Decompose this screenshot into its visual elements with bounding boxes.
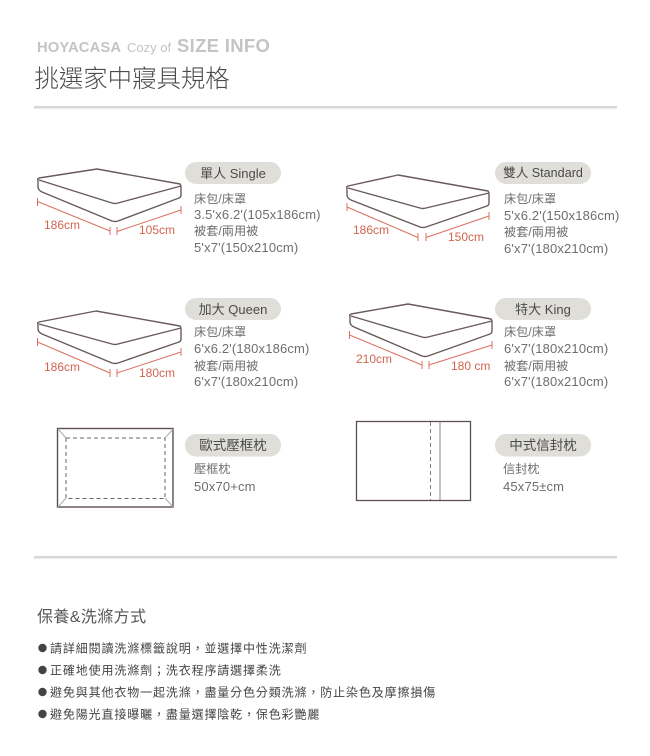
spec text: euro sham: [194, 461, 256, 494]
mattress illustration: single: [38, 169, 181, 222]
spec text: queen: 6'x7'(180x210cm): [194, 374, 298, 389]
panel: queen size: [38, 298, 310, 389]
pill: 雙人 Standard: [495, 162, 591, 184]
spec text: standard: 6'x7'(180x210cm): [504, 241, 608, 256]
header label: HOYACASA Cozy of SIZE INFO: SIZE INFO: [177, 35, 270, 56]
spec text: king: 6'x7'(180x210cm): [504, 374, 608, 389]
spec text: single: 床包/床罩: [194, 192, 246, 206]
care heading: 保養&洗滌方式: [37, 608, 146, 626]
panel: euro sham pillow: [58, 428, 281, 507]
spec text: envelope: 信封枕: [503, 461, 540, 476]
spec text: queen: 被套/兩用被: [194, 359, 258, 373]
dimension label: 186cm: 186cm: [353, 223, 389, 237]
care item 3: 避免與其他衣物一起洗滌，盡量分色分類洗滌，防止染色及摩擦損傷: [50, 684, 436, 700]
dimension label: 180 cm: 180 cm: [451, 359, 490, 373]
dimension label: 186cm: 186cm: [44, 360, 80, 374]
top divider: [34, 106, 617, 108]
spec text: king: 6'x7'(180x210cm): [504, 341, 608, 356]
spec text: envelope: 45x75±cm: [503, 479, 564, 494]
care list: [38, 640, 436, 722]
pill: 加大 Queen: 加大 Queen: [199, 302, 267, 317]
panel: envelope pillow: [356, 422, 591, 500]
panel: king size: [350, 298, 608, 389]
dimension label: 186cm: 186cm: [44, 218, 80, 232]
mattress illustration: queen: [38, 311, 181, 364]
pill: 單人 Single: 單人 Single: [200, 166, 266, 181]
mattress illustration: king: [350, 304, 492, 356]
pill: 歐式壓框枕: [185, 434, 281, 456]
spec text: king: 床包/床罩: [504, 325, 556, 339]
dimension lines: king: [350, 331, 492, 369]
pill: 特大 King: 特大 King: [515, 302, 571, 317]
care item 4: 避免陽光直接曝曬，盡量選擇陰乾，保色彩艷麗: [50, 706, 320, 722]
care item 2: 正確地使用洗滌劑；洗衣程序請選擇柔洗: [50, 662, 282, 678]
care item 1: 請詳細閱讀洗滌標籤說明，並選擇中性洗潔劑: [50, 640, 307, 656]
panel: single size: [38, 162, 321, 255]
dimension lines: queen: [38, 338, 181, 377]
spec text: standard: 床包/床罩: [504, 192, 556, 206]
pill: 單人 Single: [185, 162, 281, 184]
spec text: euro sham: 壓框枕: [194, 461, 231, 476]
pill: 中式信封枕: [495, 434, 591, 456]
spec text: queen: [194, 325, 310, 389]
spec text: single: [194, 192, 321, 255]
lower divider: [34, 556, 617, 558]
pill: 雙人 Standard: 雙人 Standard: [503, 166, 583, 180]
spec text: envelope: [503, 461, 564, 494]
pill: 中式信封枕: 中式信封枕: [509, 438, 577, 453]
dimension label: 210cm: 210cm: [356, 352, 392, 366]
spec text: euro sham: 50x70+cm: [194, 479, 256, 494]
spec text: standard: 5'x6.2'(150x186cm): [504, 208, 620, 223]
dimension label: 150cm: 150cm: [448, 230, 484, 244]
dimension lines: single: [38, 198, 181, 235]
pill: 特大 King: [495, 298, 591, 320]
spec text: king: [504, 325, 608, 389]
spec text: single: 被套/兩用被: [194, 224, 258, 238]
dimension label: 180cm: 180cm: [139, 366, 175, 380]
spec text: king: 被套/兩用被: [504, 359, 568, 373]
mattress illustration: standard: [347, 175, 489, 228]
spec text: queen: 6'x6.2'(180x186cm): [194, 341, 310, 356]
spec text: standard: 被套/兩用被: [504, 225, 568, 239]
pillow illustration: euro sham: [58, 428, 173, 507]
header label: HOYACASA Cozy of SIZE INFO: HOYACASA: [37, 40, 121, 56]
spec text: standard: [504, 192, 620, 256]
header label: HOYACASA Cozy of SIZE INFO: Cozy of: [127, 40, 171, 55]
pill: 歐式壓框枕: 歐式壓框枕: [199, 438, 267, 453]
pillow illustration: envelope: [356, 422, 470, 500]
dimension label: 105cm: 105cm: [139, 223, 175, 237]
spec text: queen: 床包/床罩: [194, 325, 246, 339]
spec text: single: 5'x7'(150x210cm): [194, 240, 298, 255]
spec text: single: 3.5'x6.2'(105x186cm): [194, 207, 321, 222]
panel: standard size: [347, 162, 620, 256]
title: 挑選家中寢具規格: [34, 66, 230, 93]
pill: 加大 Queen: [185, 298, 281, 320]
dimension lines: standard: [347, 203, 489, 241]
